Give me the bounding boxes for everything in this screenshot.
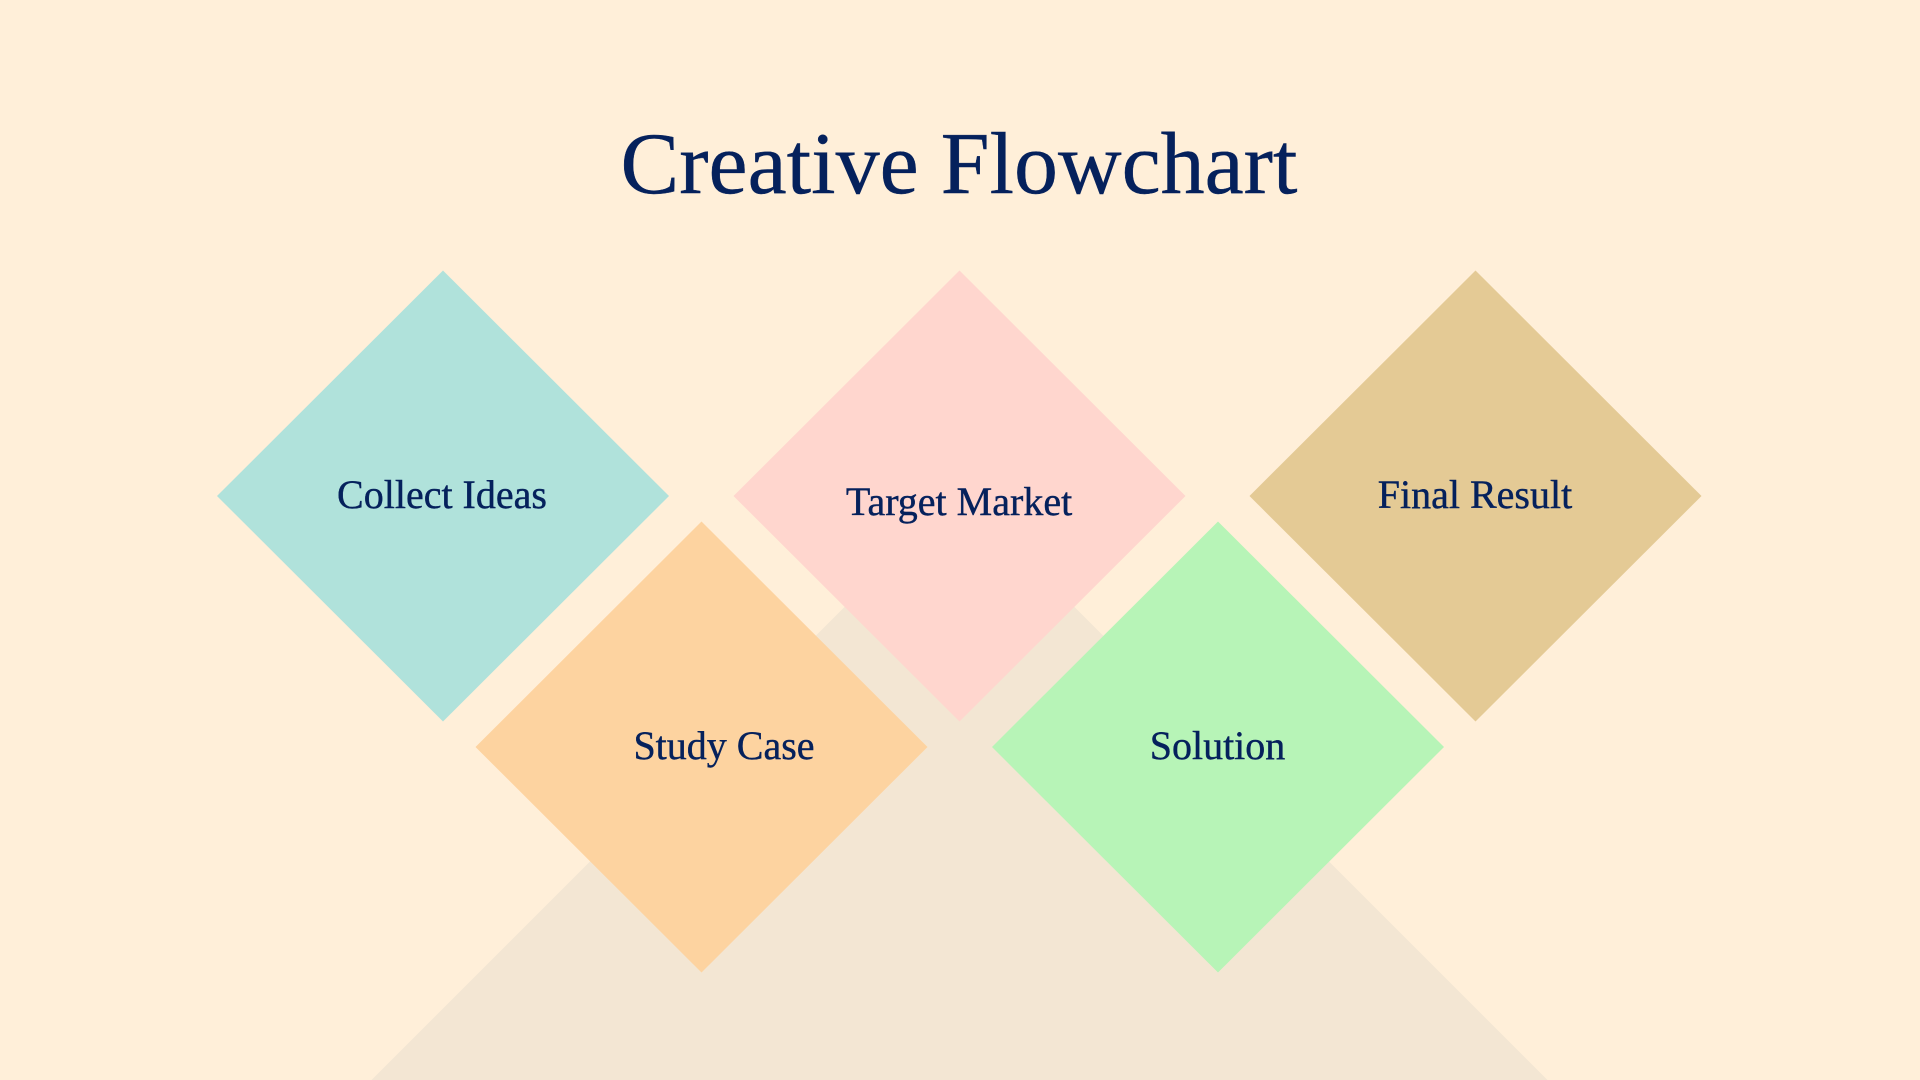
diamond: Solution [992,522,1444,972]
diamond: Collect Ideas [217,270,669,722]
title: Creative Flowchart [621,116,1297,213]
diamond: Final Result [1250,270,1702,722]
diamond: Collect Ideas: Collect Ideas [337,472,547,517]
diamond: Target Market [734,270,1186,722]
diamond: Study Case: Study Case [633,723,815,768]
diamond: Solution: Solution [1150,723,1285,768]
diamond: Study Case [476,522,928,972]
diamond: Final Result: Final Result [1378,472,1572,517]
diamond: Target Market: Target Market [846,479,1072,524]
background triangle [372,492,1548,1080]
